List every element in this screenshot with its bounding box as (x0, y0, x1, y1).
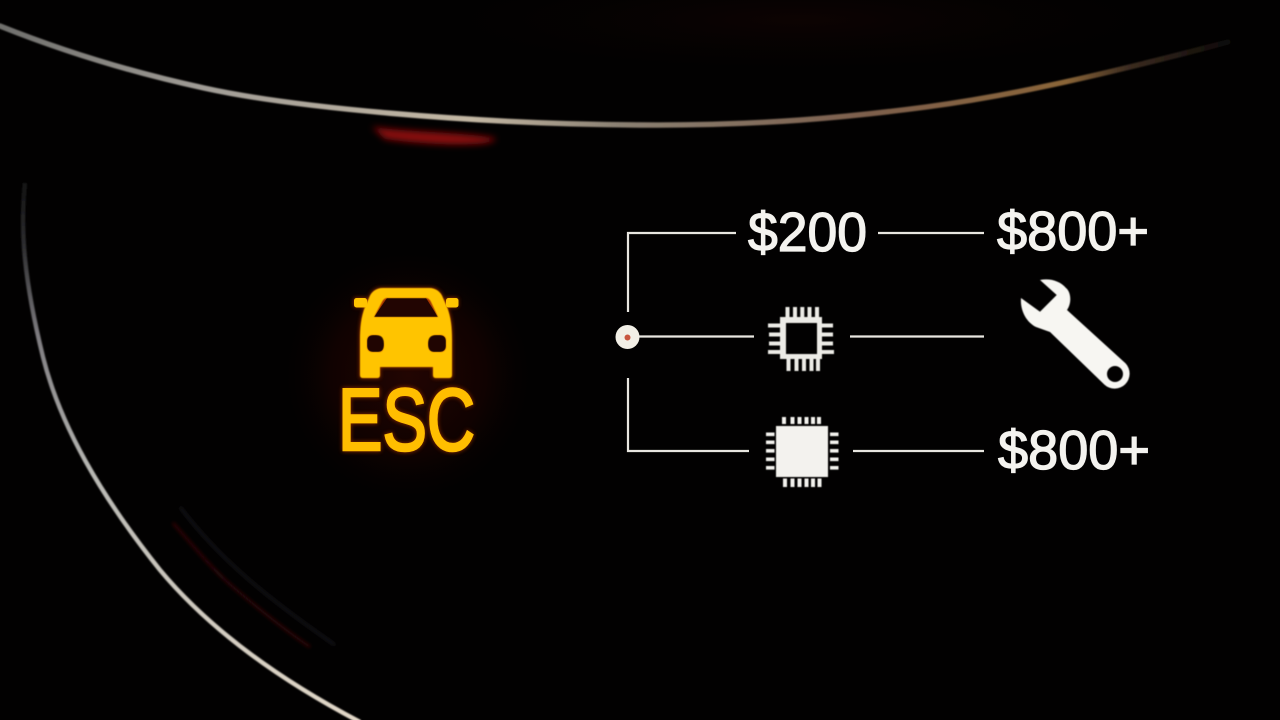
icon: wrench (1021, 279, 1130, 389)
connector: bottom chip to $800+ (853, 450, 984, 452)
icon: left headlight (367, 335, 384, 352)
price: top $800+: $800+ (997, 200, 1149, 262)
ESC label halo: ESC (338, 370, 475, 469)
ESC warning lamp glow (278, 245, 538, 505)
icon: right headlight (428, 335, 446, 352)
faint inner red arc (173, 523, 310, 647)
origin node (616, 325, 640, 349)
connector lines (628, 233, 984, 451)
middle branch connector (638, 335, 754, 338)
icon: ESC warning light (338, 288, 475, 469)
icon: outlined chip (768, 307, 834, 371)
top branch connector (628, 233, 736, 312)
bottom branch connector (628, 378, 749, 451)
left dashboard arc (23, 183, 360, 720)
ESC label: ESC (338, 370, 475, 469)
faint inner grey arc (180, 507, 335, 645)
icon: car windshield (374, 298, 438, 317)
icon: right mirror (446, 298, 458, 308)
icon: solid chip (766, 417, 838, 487)
icon: left mirror (354, 298, 367, 308)
connector: $200 to $800+ (878, 232, 984, 234)
connector: chip to wrench (850, 335, 984, 338)
top dashboard arc (0, 26, 1228, 125)
top ambient glow (380, 0, 1220, 80)
red reflection under arc (372, 127, 495, 145)
price: $200: $200 (748, 201, 867, 263)
icon: car front (360, 288, 452, 378)
icon: car halo (354, 288, 458, 378)
price: bottom $800+: $800+ (998, 419, 1150, 481)
